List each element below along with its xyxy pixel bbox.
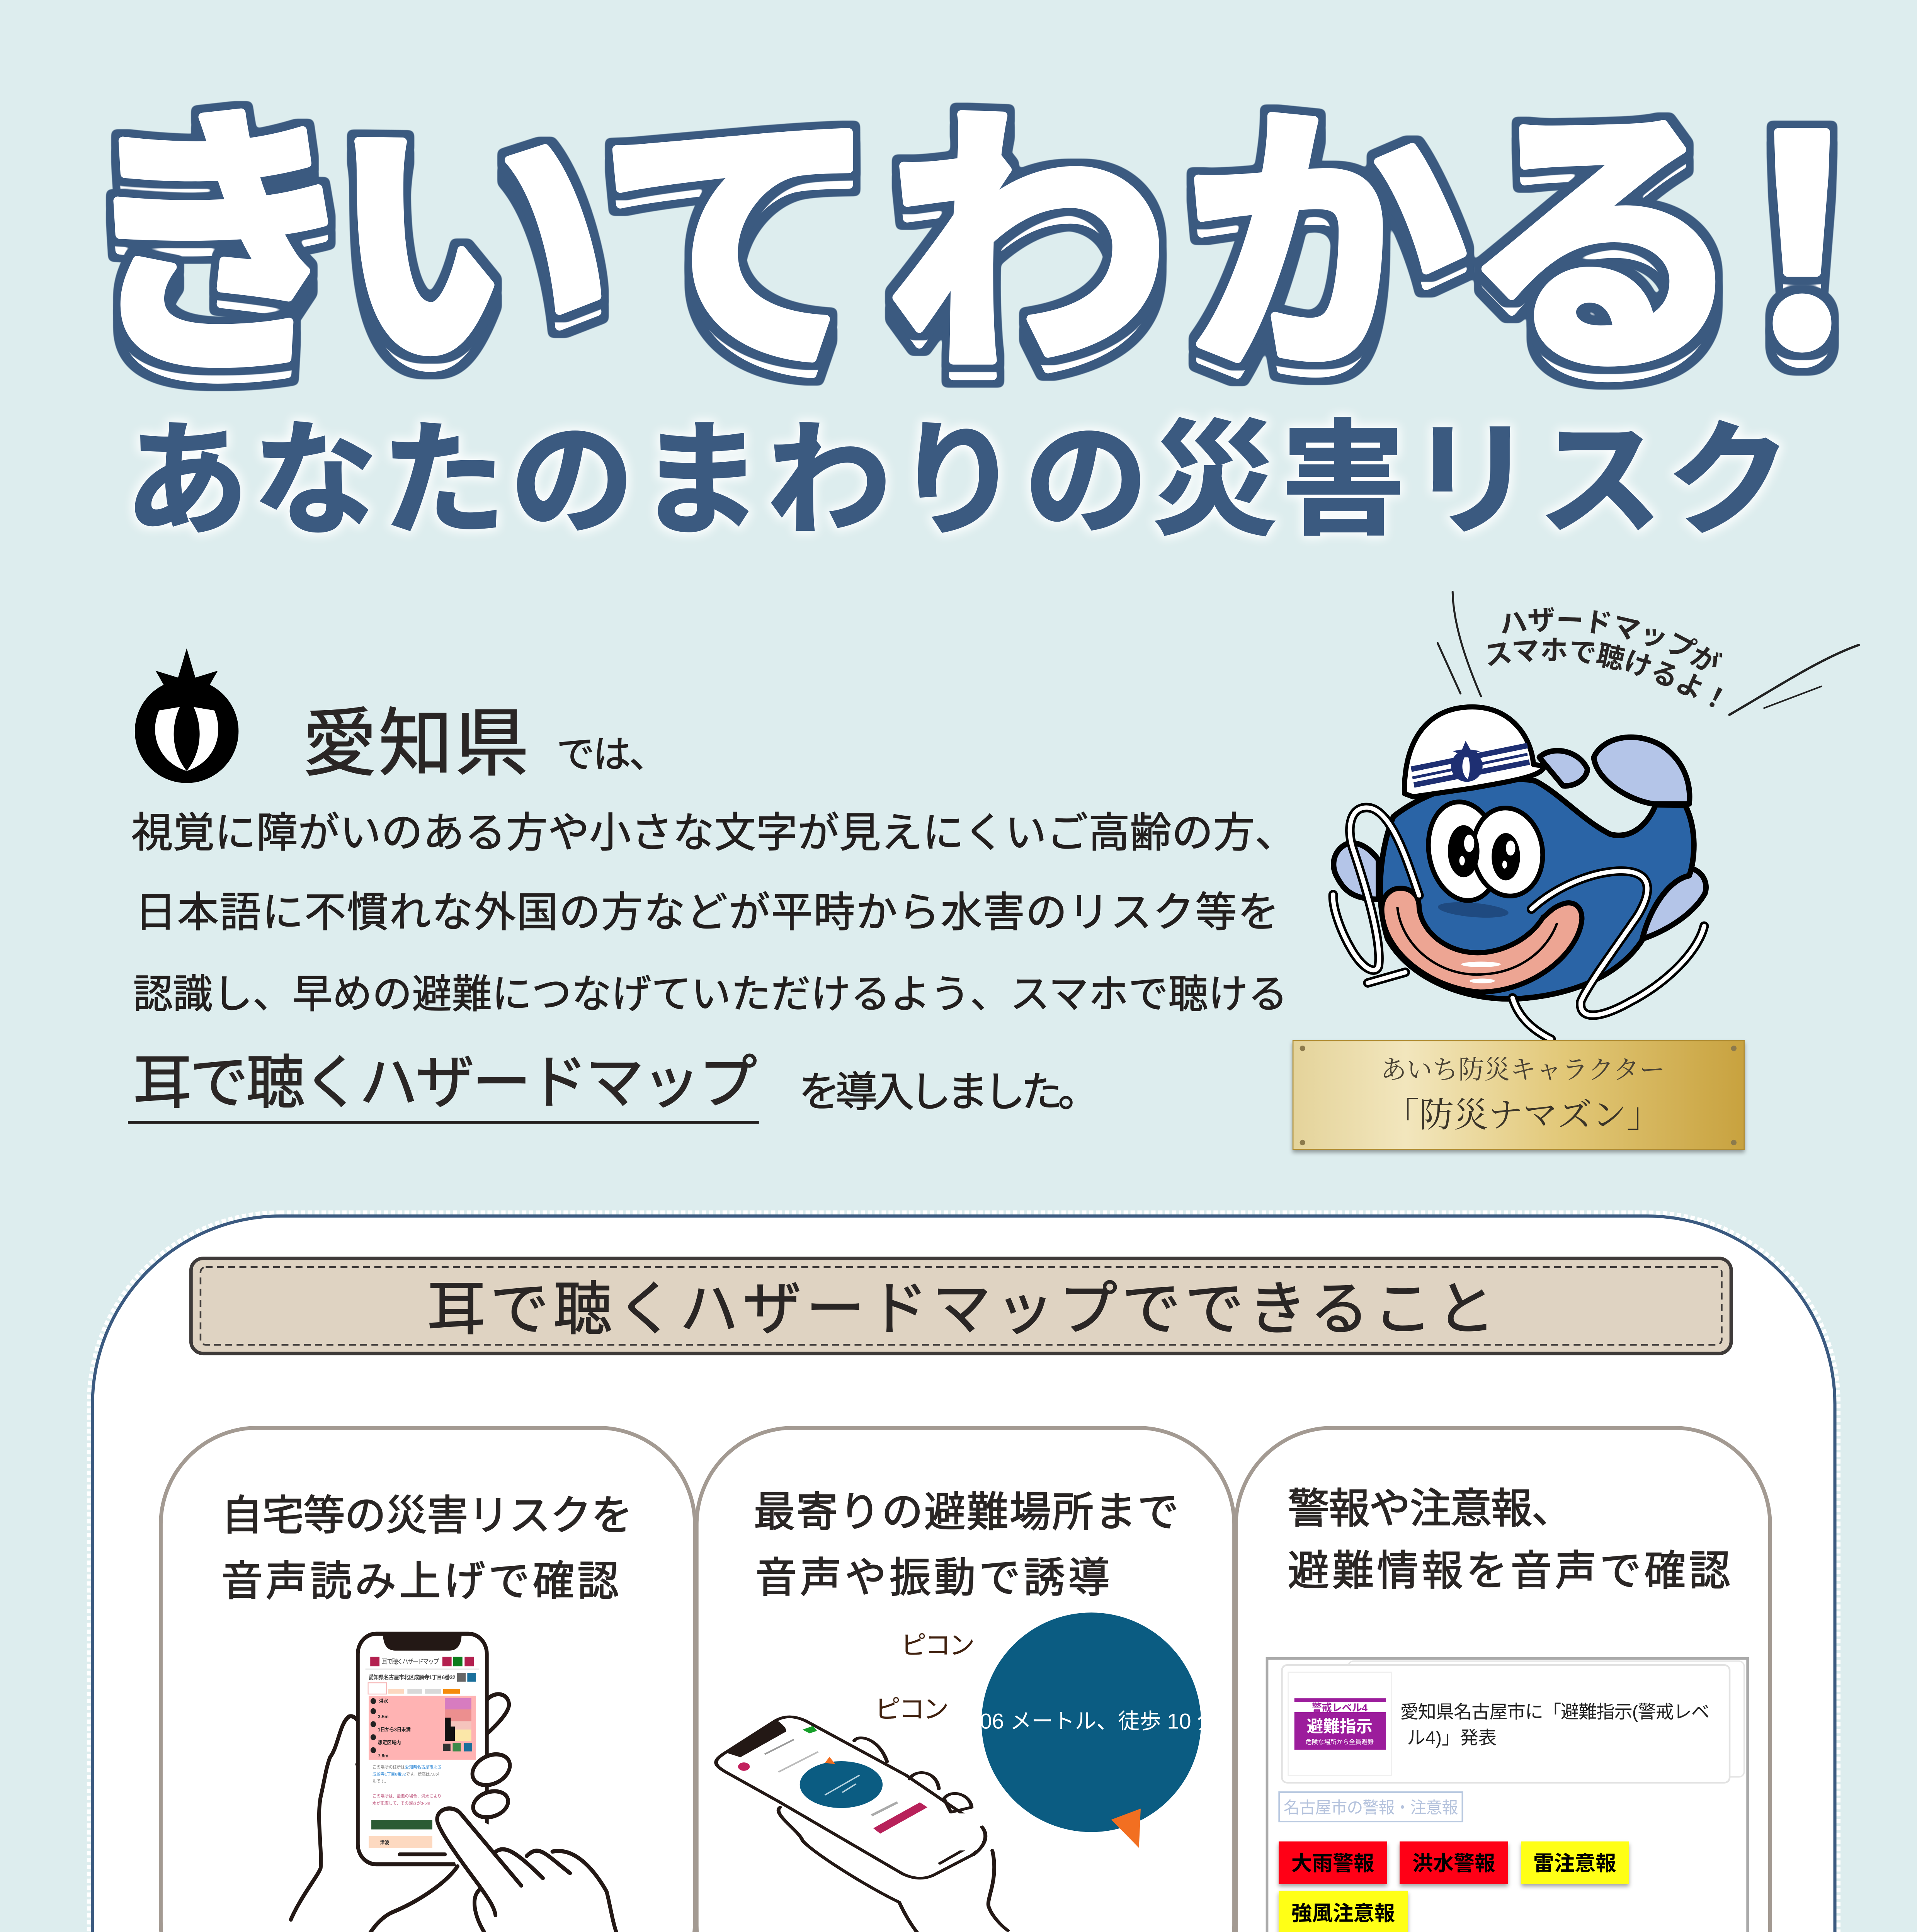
de wa: では、 (556, 733, 667, 776)
card: risk read aloud (161, 1428, 695, 1932)
speech text: ハザードマップが (1498, 605, 1725, 680)
panel heading banner: 耳で聴くハザードマップでできること (427, 1276, 1495, 1342)
compass distance text: 806 メートル、徒歩 10 分 (968, 1709, 1219, 1733)
app screen: この場所の住所は愛知県名古屋市北区 (373, 1764, 442, 1770)
card 3 heading: 避難情報を音声で確認 (1288, 1548, 1730, 1594)
intro text ending: を導入しました。 (799, 1069, 1099, 1115)
title: きいてわかる！ (76, 88, 1917, 406)
mouth (1382, 888, 1582, 992)
app screen: 7.8m (378, 1753, 388, 1759)
card 3 heading (1288, 1485, 1730, 1594)
underline (128, 1121, 759, 1124)
warning: heavy rain (1279, 1842, 1387, 1884)
card 2 heading: 最寄りの避難場所まで (754, 1489, 1179, 1535)
card 1 heading: 音声読み上げで確認 (221, 1558, 619, 1604)
app screen: 想定区域内 (378, 1740, 401, 1745)
area label (1279, 1792, 1462, 1821)
app screen: 洪水 (379, 1698, 388, 1704)
warning: flood: 洪水警報 (1412, 1852, 1495, 1875)
fins (1334, 737, 1706, 942)
advisory: strong wind: 強風注意報 (1291, 1902, 1395, 1925)
subtitle: あなたのまわりの災害リスク (124, 411, 1791, 550)
beep label 2: ピコン (875, 1695, 949, 1724)
advisory: thunder (1521, 1842, 1629, 1884)
notch (383, 1634, 462, 1651)
compass circle (981, 1612, 1201, 1832)
app screen: 水が氾濫して、その深さが3-5m (373, 1800, 430, 1806)
hat (1405, 707, 1544, 797)
plate name: 「防災ナマズン」 (1385, 1097, 1661, 1135)
app screen: 3-5m (378, 1714, 389, 1719)
intro text line 1: 視覚に障がいのある方や小さな文字が見えにくいご高齢の方、 (131, 810, 1296, 856)
app screen (366, 1657, 479, 1856)
alert card: 危険な場所から全員避難 (1305, 1739, 1374, 1746)
plate caption: あいち防災キャラクター (1381, 1055, 1665, 1084)
panel: what the app can do (90, 1213, 1837, 1932)
card 1 heading (221, 1492, 633, 1604)
illustration: phone in hands (291, 1634, 627, 1932)
card: evacuation guidance (697, 1428, 1234, 1932)
right fingers (468, 1694, 514, 1821)
prefecture name: 愛知県 (303, 702, 529, 785)
app screen: 津波 (380, 1839, 390, 1845)
app screen: ルです。 (373, 1779, 388, 1784)
advisory: strong wind (1279, 1891, 1408, 1932)
screenshot frame (1267, 1658, 1748, 1932)
speech lines (1437, 592, 1859, 715)
intro section (128, 648, 1296, 1124)
nose (1437, 900, 1509, 920)
alert card: ル4)」発表 (1407, 1728, 1497, 1748)
app screen: 成願寺1丁目6番32です。標高は7.8メ (373, 1771, 439, 1777)
pointing hand (362, 1808, 627, 1932)
card: warnings read aloud (1236, 1428, 1770, 1932)
app screen: 耳で聴くハザードマップ (382, 1658, 439, 1665)
intro text line 3: 認識し、早めの避難につなげていただけるよう、スマホで聴ける (133, 972, 1288, 1016)
speech text: スマホで聴けるよ！ (1482, 635, 1735, 718)
left hand (291, 1716, 364, 1920)
highlighted service name: 耳で聴くハザードマップ (133, 1050, 757, 1116)
whiskers (1333, 808, 1704, 1039)
icon: Aichi prefecture emblem (135, 648, 238, 783)
orange direction marker (1111, 1809, 1141, 1848)
beep label 1: ピコン (901, 1631, 975, 1660)
illustration: tilted phone in hand (716, 1717, 1008, 1932)
warning: heavy rain: 大雨警報 (1291, 1852, 1374, 1875)
panel heading banner (191, 1259, 1731, 1354)
alert card: 警戒レベル4 (1312, 1702, 1368, 1714)
card 2 heading: 音声や振動で誘導 (755, 1554, 1110, 1601)
eyes (1421, 796, 1548, 906)
card 2 heading (754, 1489, 1179, 1601)
alert card: 愛知県名古屋市に「避難指示(警戒レベ (1400, 1702, 1709, 1723)
app screen: 愛知県名古屋市北区成願寺1丁目6番32 (369, 1674, 456, 1680)
notch (725, 1720, 786, 1757)
card 3 heading: 警報や注意報、 (1288, 1485, 1573, 1532)
alert card: 避難指示 (1307, 1718, 1373, 1736)
area label: 名古屋市の警報・注意報 (1283, 1799, 1458, 1817)
app screen: この場所は、最悪の場合、洪水により (373, 1793, 441, 1799)
alert card (1282, 1661, 1744, 1782)
name plate (1293, 1041, 1744, 1150)
card 1 heading: 自宅等の災害リスクを (221, 1492, 633, 1539)
warning: flood (1400, 1842, 1508, 1884)
app screen: 1日から3日未満 (378, 1726, 411, 1733)
advisory: thunder: 雷注意報 (1533, 1852, 1616, 1875)
body (1380, 779, 1694, 999)
intro text line 2: 日本語に不慣れな外国の方などが平時から水害のリスク等を (135, 889, 1279, 935)
mascot: Bosai Namazun (1333, 592, 1859, 1039)
phone body (358, 1634, 487, 1864)
